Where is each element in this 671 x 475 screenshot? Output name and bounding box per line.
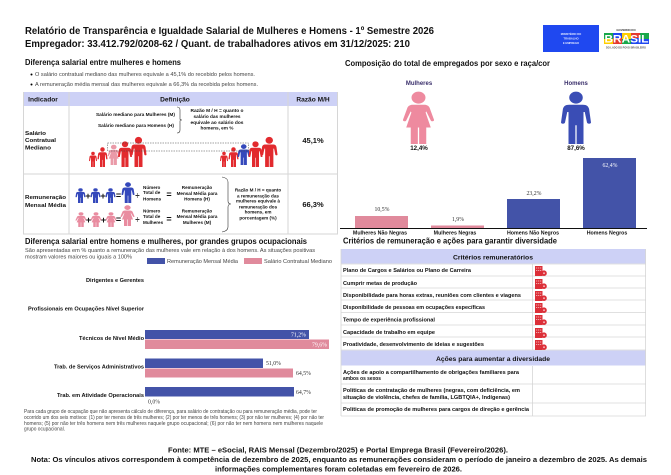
- value labels: 64,5%: [296, 371, 311, 377]
- bar values: 1,9%: [452, 217, 464, 223]
- text block: summary bullets: [30, 72, 258, 88]
- logo: governo do Brasil: BRASIL: [604, 34, 649, 46]
- icons: pink people sum: +: [101, 215, 106, 225]
- heading: critérios: Critérios de remuneração e ações para garantir diversidade: [343, 236, 558, 246]
- pictogram: mulheres: Mulheres: [406, 81, 433, 87]
- footer: source and note: Fonte: MTE – eSocial, RAIS Mensal (Dezembro/2025) e Portal Emprega Brasil (Fevereiro/2026).: [168, 448, 508, 454]
- bar values: 62,4%: [603, 163, 618, 169]
- actions list: situação de violência, chefes de família, LGBTQIA+, Indígenas): [343, 395, 510, 401]
- criteria list: Disponibilidade de pessoas em ocupações específicas: [343, 305, 485, 311]
- actions list: Políticas de contratação de mulheres (negras, com deficiência, em: [343, 388, 520, 394]
- icons: pink people sum: =: [116, 214, 121, 224]
- legend: Salário Contratual Mediano: [264, 259, 332, 265]
- logo: governo do Brasil: [604, 28, 649, 50]
- panel: indicator table: [23, 92, 338, 234]
- icons: blue people sum: ÷: [135, 191, 140, 200]
- actions list: [343, 370, 529, 413]
- value labels: 71,2%: [291, 332, 306, 338]
- logo: governo do Brasil: GOVERNO DO: [616, 28, 636, 32]
- footer: source and note: [31, 448, 647, 474]
- row label: salário contratual mediano: Mediano: [25, 146, 52, 152]
- pictogram: mulheres: [403, 81, 434, 152]
- category labels: Trab. em Atividade Operacionais: [57, 393, 144, 399]
- text block: summary bullets: O salário contratual mediano das mulheres equivale a 45,1% do recebido pelos homens.: [35, 72, 255, 78]
- definition text: remuneração média: Remuneração: [182, 208, 212, 214]
- logo: ministry: MINISTÉRIO DO: [561, 31, 581, 36]
- heading: diferença por grupos: Diferença salarial entre homens e mulheres, por grandes grupos ocupacionais: [25, 236, 307, 246]
- bar categories: Mulheres Negras: [434, 230, 476, 236]
- footnote: [24, 409, 324, 432]
- definition text: remuneração média: Homens (H): [184, 196, 210, 202]
- icons: blue people sum: =: [116, 190, 121, 200]
- footer: source and note: informações complementares foram coletadas em fevereiro de 2026.: [215, 466, 462, 474]
- icons: blue people sum: +: [85, 191, 91, 201]
- category labels: Profissionais em Ocupações Nível Superior: [28, 306, 145, 312]
- definition text: salário mediano: salário das mulheres: [194, 114, 241, 120]
- definition text: remuneração média: Razão M / H = quanto: [235, 188, 281, 192]
- icons: blue people sum: [76, 182, 140, 203]
- table header: Indicador: [28, 96, 58, 104]
- definition text: remuneração média: Mulheres (M): [183, 220, 212, 225]
- icons: blue people sum: +: [100, 191, 106, 201]
- legend: [147, 258, 332, 265]
- criteria list: Cumprir metas de produção: [343, 281, 418, 287]
- definition text: salário mediano: equivale ao salário dos: [190, 120, 244, 126]
- value: 66,3%: 66,3%: [302, 200, 324, 209]
- logo: ministry: [543, 25, 599, 52]
- definition text: remuneração média: Mensal Média para: [177, 191, 218, 196]
- text block: summary bullets: A remuneração média mensal das mulheres equivale a 66,3% da recebida pelos homens.: [35, 82, 258, 88]
- definition text: salário mediano: [96, 107, 244, 133]
- criteria list: Tempo de experiência profissional: [343, 318, 436, 324]
- value labels: [148, 332, 327, 406]
- definition text: remuneração média: Número: [143, 185, 161, 190]
- criteria list: Capacidade de trabalho em equipe: [343, 330, 435, 336]
- definition text: remuneração média: Remuneração: [182, 185, 212, 190]
- definition text: remuneração média: Total de: [143, 214, 161, 219]
- heading: composição: Composição do total de empregados por sexo e raça/cor: [345, 59, 550, 68]
- value: 45,1%: 45,1%: [302, 136, 324, 145]
- definition text: remuneração média: =: [166, 190, 172, 200]
- value labels: 79,6%: [312, 342, 327, 348]
- footnote: grupo ocupacional.: [24, 426, 65, 432]
- logo: ministry: E EMPREGO: [563, 41, 579, 45]
- row label: salário contratual mediano: Salário: [25, 131, 46, 137]
- text block: chart description: mostram valores maiores ou iguais a 100%: [25, 254, 132, 260]
- bar chart: sexo e raça: [340, 158, 647, 236]
- definition text: remuneração média: Homens: [143, 196, 162, 202]
- actions list: Políticas de promoção de mulheres para cargos de direção e gerência: [343, 407, 529, 413]
- row label: remuneração mensal média: [25, 195, 67, 209]
- actions list: Ações de apoio a compartilhamento de obrigações familiares para: [343, 370, 519, 376]
- heading: diferença salarial: Diferença salarial entre mulheres e homens: [25, 58, 182, 67]
- pictogram: homens: Homens: [564, 81, 588, 87]
- definition text: remuneração média: Mulheres: [143, 220, 164, 225]
- definition text: remuneração média: porcentagem (%): [239, 216, 277, 220]
- icons: pink people sum: ÷: [135, 215, 140, 224]
- section header: ações: Ações para aumentar a diversidade: [436, 356, 550, 363]
- table header: Razão M/H: [296, 96, 330, 104]
- pictogram: homens: [561, 81, 591, 152]
- category labels: Trab. de Serviços Administrativos: [54, 364, 144, 370]
- value labels: 51,0%: [266, 361, 281, 367]
- definition text: salário mediano: homens, em %: [200, 126, 234, 132]
- definition text: remuneração média: a remuneração das: [237, 194, 279, 198]
- footer: source and note: Nota: Os vínculos ativos correspondem à competência de dezembro de 2025, enquanto as remunerações consideram o período de janeiro a dezembro de 2025. As demais: [31, 457, 647, 464]
- footnote: Para cada grupo de ocupação que não apresenta cálculo de diferença, para salário de contratação ou para remuneração média, pode ter: [24, 409, 317, 415]
- definition text: remuneração média: remuneração dos: [239, 204, 278, 210]
- definition text: remuneração média: Número: [143, 208, 161, 214]
- pictogram: homens: 87,6%: [567, 145, 585, 152]
- section header: critérios remuneratórios: Critérios remuneratórios: [453, 254, 533, 262]
- row label: salário contratual mediano: Contratual: [25, 138, 56, 144]
- definition text: salário mediano: Salário mediano para Homens (H): [98, 123, 174, 129]
- text block: chart description: São apresentadas em % quanto a remuneração das mulheres vale em relação à dos homens. As situações positivas: [25, 248, 315, 254]
- pictogram: mulheres: 12,4%: [410, 145, 428, 152]
- row label: remuneração mensal média: Mensal Média: [25, 203, 67, 209]
- definition text: remuneração média: =: [166, 214, 172, 224]
- category labels: [28, 278, 145, 399]
- bars: [145, 330, 329, 396]
- bar categories: Mulheres Não Negras: [353, 230, 407, 236]
- value labels: 64,7%: [296, 390, 311, 396]
- bar values: [375, 163, 618, 223]
- definition text: remuneração média: Total de: [143, 190, 161, 195]
- criteria list: Plano de Cargos e Salários ou Plano de Carreira: [343, 268, 471, 274]
- category labels: Técnicos de Nível Médio: [79, 336, 145, 342]
- actions list: ambos os sexos: [343, 376, 381, 382]
- definition text: salário mediano: Salário mediano para Mulheres (M): [96, 112, 175, 118]
- criteria list: [343, 268, 521, 348]
- footnote: ocorrido um dos seis motivos: (1) por ter menos de três mulheres; (2) por ter menos de três homens; (3) por não ter mulheres; (4) por não ter: [24, 415, 324, 421]
- icons: criteria markers: [535, 266, 547, 350]
- icons: pink people sum: [75, 205, 140, 227]
- text block: chart description: [25, 248, 315, 260]
- bar values: 23,2%: [527, 191, 542, 197]
- bar chart: occupational groups: [28, 278, 329, 406]
- title: Relatório de Transparência e Igualdade Salarial de Mulheres e Homens - 1º Semestre 2026: [25, 26, 434, 37]
- icons: pink people sum: +: [86, 215, 91, 225]
- table header: Definição: [160, 96, 190, 104]
- legend: Remuneração Mensal Média: [167, 259, 238, 265]
- bar values: 10,5%: [375, 207, 390, 213]
- bar categories: Homens Negros: [587, 230, 627, 236]
- value labels: 0,0%: [148, 400, 160, 406]
- definition text: remuneração média: Mensal Média para: [177, 214, 218, 219]
- bar categories: Homens Não Negros: [507, 230, 559, 236]
- footnote: homens; (5) por não ter três homens nem três mulheres naquele grupo ocupacional; (6) por não ter nem homens nem mulheres naquele: [24, 421, 323, 427]
- definition text: remuneração média: homens, em: [245, 210, 271, 214]
- title: [25, 26, 434, 50]
- criteria list: Proatividade, desenvolvimento de ideias e sugestões: [343, 342, 484, 348]
- category labels: Dirigentes e Gerentes: [86, 278, 144, 284]
- logo: ministry: TRABALHO: [563, 36, 579, 40]
- bar categories: [353, 230, 627, 236]
- logo: governo do Brasil: DO LADO DO POVO BRASILEIRO: [606, 46, 646, 50]
- definition text: salário mediano: Razão M / H = quanto o: [190, 108, 244, 114]
- row label: remuneração mensal média: Remuneração: [25, 195, 66, 201]
- criteria list: Disponibilidade para horas extras, reuniões com clientes e viagens: [343, 293, 521, 299]
- definition text: remuneração média: mulheres equivale à: [236, 198, 280, 204]
- panel: criteria table: [341, 249, 646, 416]
- row label: salário contratual mediano: [25, 131, 56, 152]
- definition text: remuneração média: [143, 177, 281, 232]
- table header: [28, 96, 330, 104]
- title: Empregador: 33.412.792/0208-62 / Quant. de trabalhadores ativos em 31/12/2025: 210: [25, 39, 410, 50]
- icons: median people: [89, 137, 278, 167]
